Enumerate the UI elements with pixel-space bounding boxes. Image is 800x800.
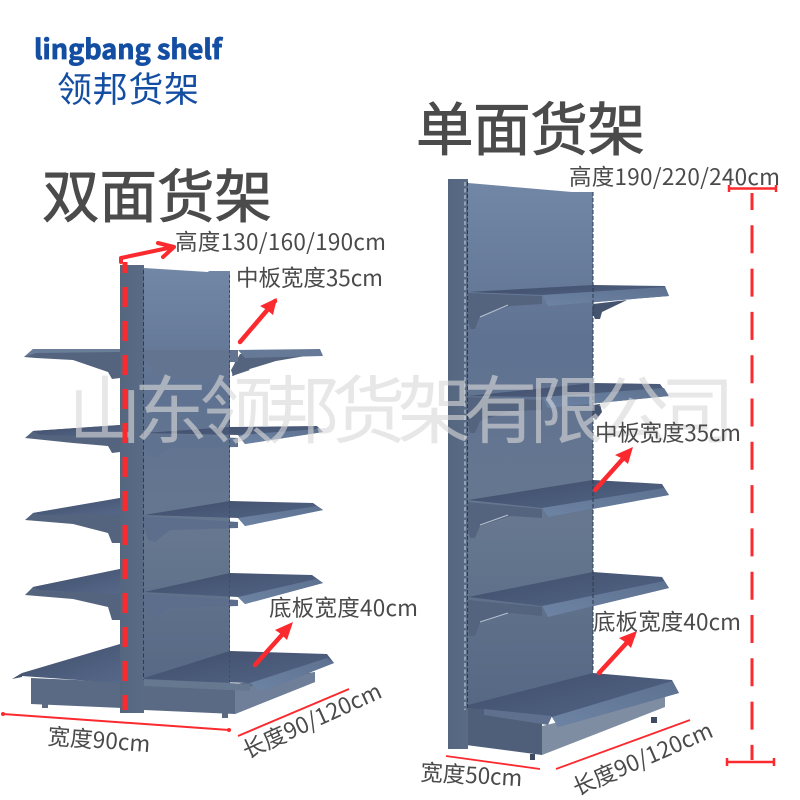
callout: bottom shelf width, double unit [255,591,418,665]
left shelf 3 [25,498,120,543]
callout: bottom shelf width, single unit [593,605,741,673]
dashed height line [750,193,754,760]
left base shelf [12,644,122,708]
dimension: height, double unit [121,225,386,710]
dimension: length 90/120cm, double unit: 长度90/120cm [237,674,386,765]
double-sided shelf unit [12,265,334,718]
shelf 1 [468,285,669,329]
title: single-sided shelf: 单面货架 [416,83,645,167]
label: height: 高度190/220/240cm [569,160,780,192]
logo: lingbang shelf: 领邦货架 [57,62,199,113]
callout: middle shelf width, double unit [236,261,383,342]
back base plinth [466,697,665,760]
right base shelf [144,651,334,692]
dimension: length 90/120cm, single unit: 长度90/120cm [567,713,717,800]
callout: middle shelf width, double unit: 中板宽度35cm [236,261,383,293]
shelf 4 [468,572,669,636]
back panel [144,268,230,684]
watermark: 山东领邦货架有限公司 [68,352,735,459]
callout: bottom shelf width, single unit: 底板宽度40cm [593,605,741,637]
dimension: width 50cm: 宽度50cm [420,755,523,793]
arrow: height [121,243,174,262]
central upright [120,265,230,713]
dimension: height, single unit [569,160,780,766]
logo: lingbang shelf: lingbang shelf [34,28,223,67]
single-sided shelf unit [448,179,679,760]
label: height: 高度130/160/190cm [175,225,386,257]
right shelf 4 [144,573,323,618]
base shelf [468,673,679,727]
right base plinth [144,672,315,718]
right shelf 3 [144,501,323,542]
left shelf 2 [25,425,120,453]
logo: lingbang shelf [34,28,223,113]
title: double-sided shelf: 双面货架 [42,150,272,234]
dimension: width 90cm: 宽度90cm [46,719,152,759]
callout: middle shelf width, single unit: 中板宽度35cm [595,416,741,448]
upright post [448,179,593,749]
dimension: width 90cm [1,712,231,759]
right shelf 1 [144,349,323,378]
left shelf 1 [24,349,120,379]
shelf 2 [468,383,669,433]
right shelf 2 [144,426,323,458]
callout: middle shelf width, single unit [595,416,741,490]
left shelf 4 [25,569,120,620]
back panel [468,183,593,706]
callout: bottom shelf width, double unit: 底板宽度40cm [269,591,418,623]
shelf 3 [468,480,669,538]
